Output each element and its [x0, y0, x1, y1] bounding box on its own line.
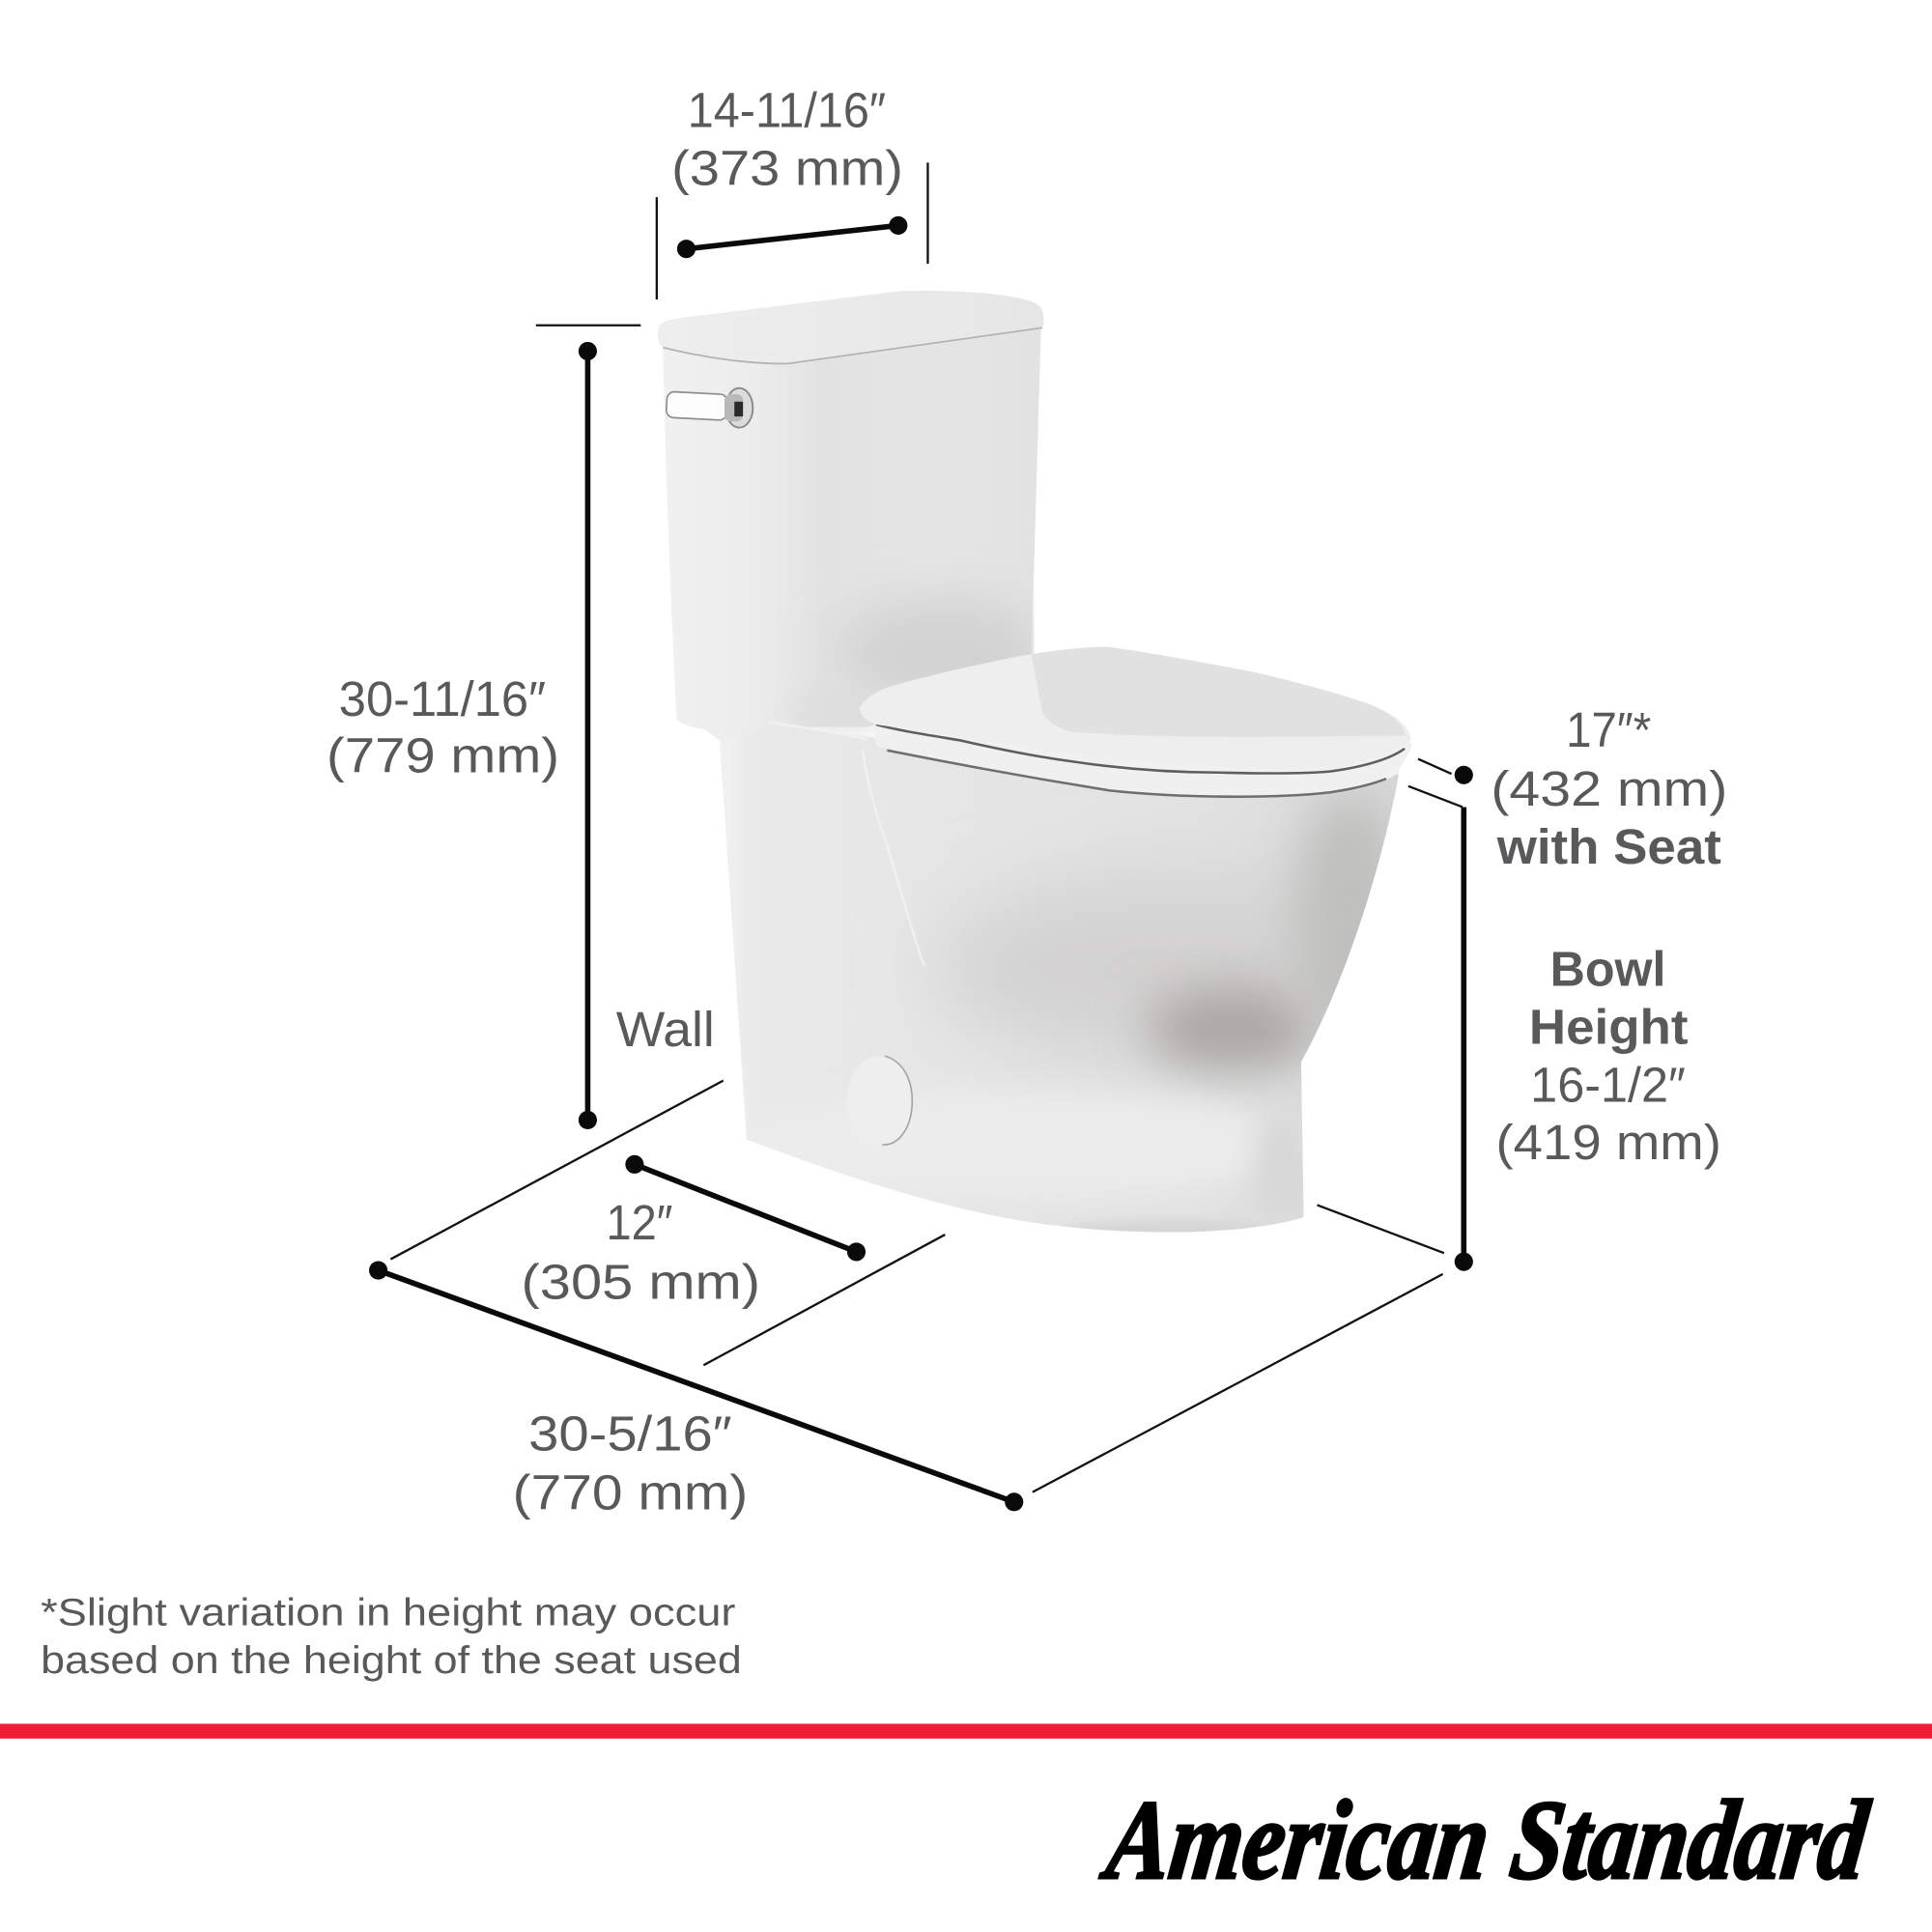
label: rough-in: (305 mm) — [522, 1254, 760, 1309]
dimension: seat and bowl height — [1318, 759, 1473, 1271]
label: bowl height: Height — [1529, 999, 1688, 1054]
label: wall: Wall — [616, 1002, 715, 1057]
label: overall height: 30-11/16″ — [339, 671, 546, 726]
label: height with seat — [1491, 702, 1727, 874]
footnote — [41, 1591, 742, 1682]
cleanout cap — [846, 1056, 913, 1145]
bright crease — [769, 722, 924, 966]
label: overall height: (779 mm) — [327, 728, 559, 783]
tank lid — [658, 291, 1044, 363]
tank — [663, 323, 1047, 741]
label: height with seat: 17″* — [1566, 702, 1651, 757]
label: overall depth: 30-5/16″ — [528, 1406, 732, 1461]
label: rough-in: 12″ — [607, 1195, 672, 1250]
label: tank width: (373 mm) — [671, 140, 903, 195]
dimension: rough-in — [625, 1155, 945, 1365]
red divider band — [0, 1723, 1932, 1739]
label: bowl height — [1495, 941, 1721, 1170]
dimension: tank width — [657, 162, 927, 299]
dimension: overall height — [536, 326, 640, 1129]
label: overall depth — [513, 1406, 748, 1520]
flush handle — [666, 388, 753, 428]
label: bowl height: 16-1/2″ — [1530, 1057, 1686, 1112]
label: tank width: 14-11/16″ — [688, 82, 886, 137]
footnote: *Slight variation in height may occur — [41, 1591, 735, 1634]
toilet product image — [658, 291, 1412, 1244]
seat ring — [874, 724, 1412, 797]
footnote: based on the height of the seat used — [41, 1639, 742, 1682]
bowl and pedestal — [720, 722, 1405, 1244]
label: height with seat: (432 mm) — [1491, 761, 1727, 816]
label: overall depth: (770 mm) — [513, 1464, 748, 1520]
label: bowl height: Bowl — [1550, 941, 1665, 996]
label: tank width — [671, 82, 903, 195]
label: bowl height: (419 mm) — [1495, 1115, 1721, 1170]
label: rough-in — [522, 1195, 760, 1309]
label: overall height — [327, 671, 559, 783]
seat lid — [860, 647, 1410, 769]
label: height with seat: with Seat — [1496, 819, 1721, 874]
dimension: overall depth — [369, 1081, 1443, 1511]
